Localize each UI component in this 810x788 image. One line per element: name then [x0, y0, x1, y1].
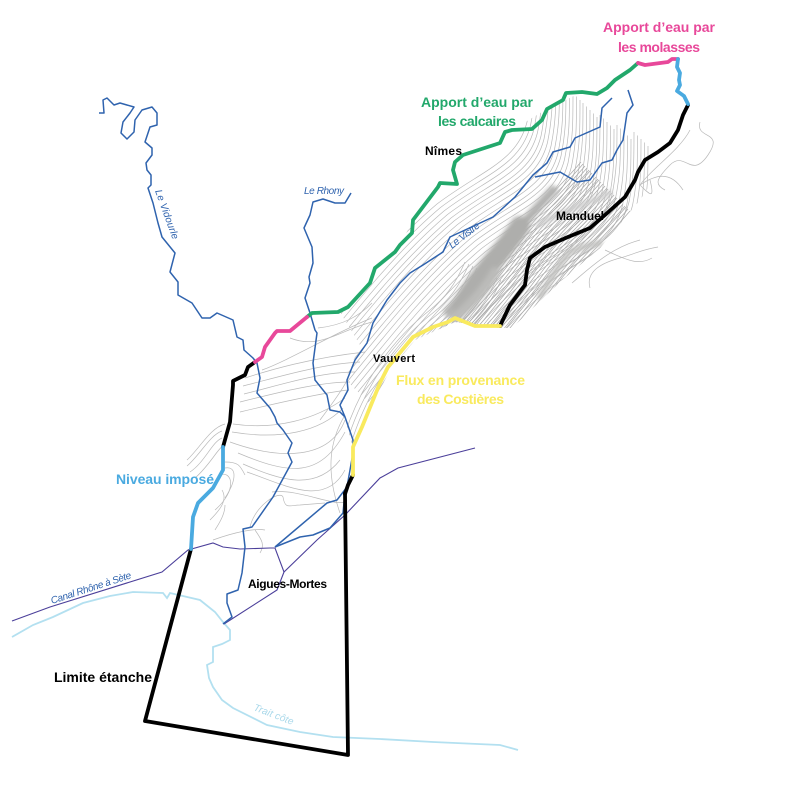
coastline [12, 592, 518, 750]
contour lines [187, 52, 713, 553]
boundary: water input through limestone (green) [307, 63, 638, 317]
contours: Costières massif [440, 162, 630, 329]
annotation: Costières flow: Flux en provenance [396, 372, 525, 388]
annotation: impermeable limit: Limite étanche [54, 669, 152, 685]
river labels [50, 186, 483, 728]
boundary: flow from the Costières (yellow) [353, 318, 500, 475]
annotation: molasses: les molasses [618, 39, 700, 55]
river: Vistre branch [535, 90, 633, 182]
annotation: Costières flow: des Costières [417, 391, 504, 407]
boundary: water input through molasse (pink) [255, 59, 678, 362]
label: Nîmes: Nîmes [425, 144, 462, 158]
label: Trait côte: Trait côte [252, 703, 295, 728]
label: Canal Rhône à Sète: Canal Rhône à Sète [50, 570, 133, 607]
legend annotations [54, 19, 716, 685]
contours: central plain [245, 352, 365, 378]
label: Le Vidourle: Le Vidourle [152, 188, 180, 241]
annotation: limestone [421, 94, 534, 129]
canal Rhône à Sète [12, 448, 475, 624]
river: Le Vidourle [99, 98, 292, 624]
label: Vauvert: Vauvert [373, 353, 415, 365]
label: Le Rhony: Le Rhony [304, 186, 345, 197]
boundary: impermeable limit (black) [145, 105, 688, 755]
label: Manduel: Manduel [556, 209, 604, 223]
contours: western fan [187, 424, 225, 460]
boundary lines [145, 59, 688, 755]
contours: southern lobe [250, 495, 325, 527]
river: Le Vistre [340, 98, 612, 417]
rivers [99, 90, 633, 624]
contours: east of Manduel [658, 122, 713, 190]
label: Le Vistre: Le Vistre [447, 220, 483, 251]
river: Le Rhony [275, 193, 353, 547]
city labels [248, 144, 604, 591]
annotation: limestone: Apport d’eau par [421, 94, 534, 110]
label: Aigues-Mortes: Aigues-Mortes [248, 577, 327, 591]
river: south channel [275, 493, 345, 547]
annotation: molasses: Apport d’eau par [603, 19, 716, 35]
boundary: imposed level (blue) [191, 59, 688, 549]
annotation: Costières flow [396, 372, 525, 407]
contours: plain north of the Vistre [341, 96, 648, 443]
annotation: limestone: les calcaires [438, 113, 516, 129]
annotation: imposed level: Niveau imposé [116, 471, 214, 487]
annotation: molasses [603, 19, 716, 55]
